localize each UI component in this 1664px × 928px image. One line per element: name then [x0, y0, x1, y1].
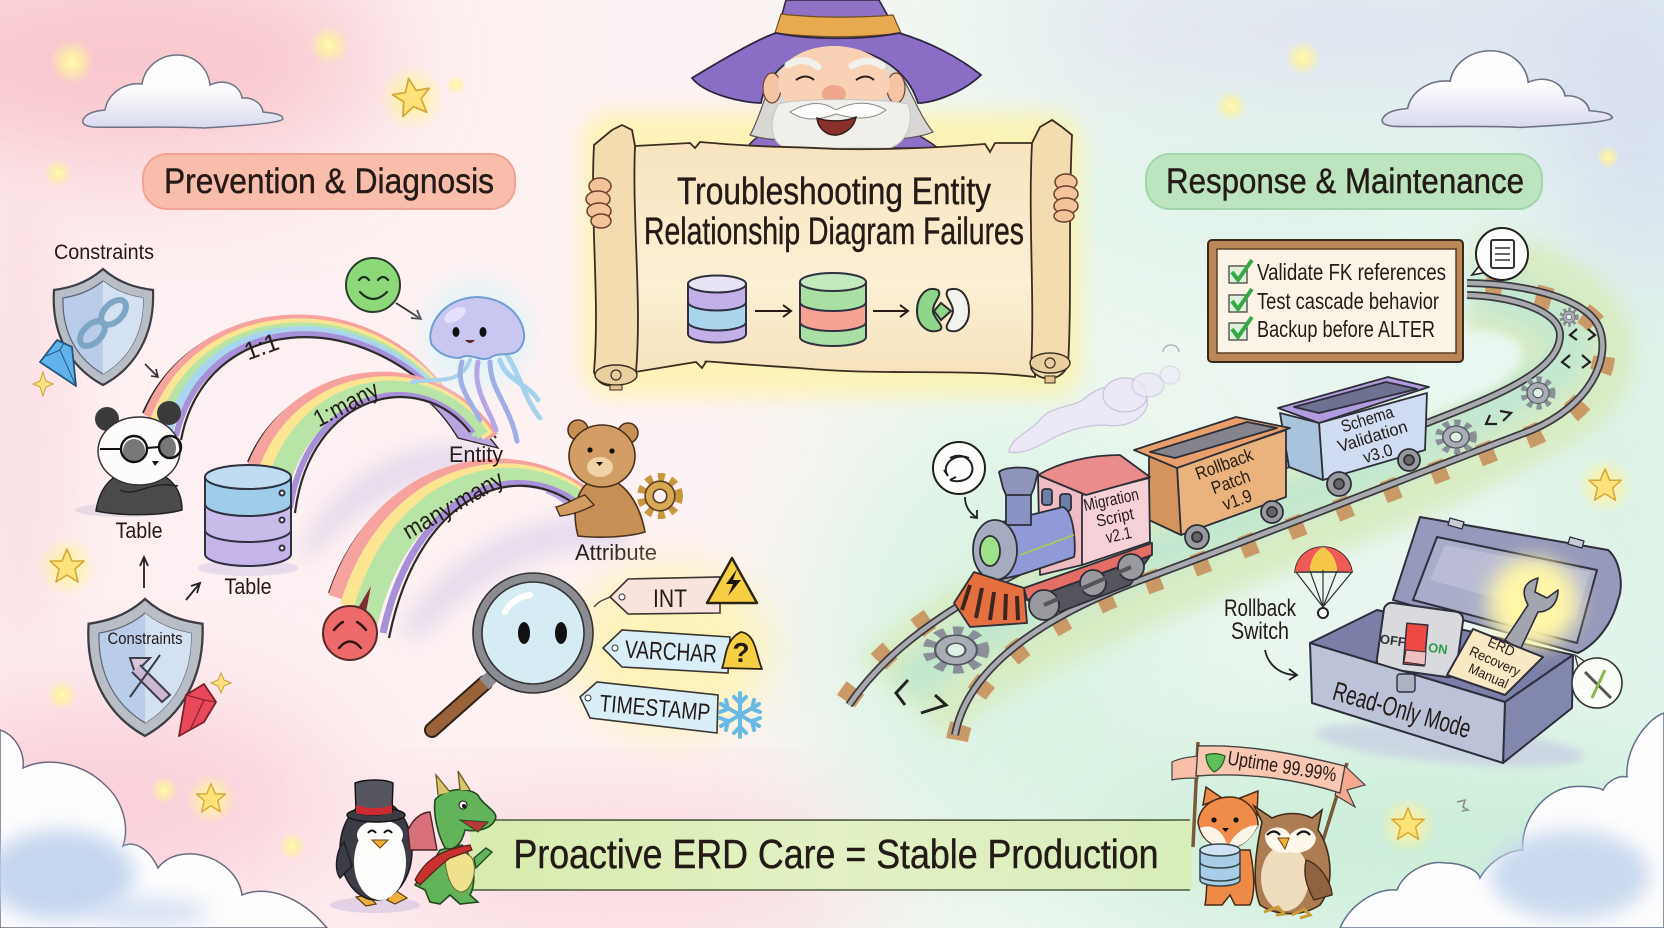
- footer banner: [470, 819, 1192, 891]
- label: rollback switch: [1224, 595, 1297, 645]
- owl: [1254, 806, 1332, 918]
- icon: uptime check: [1206, 754, 1225, 772]
- car text: schema validation: [1330, 400, 1415, 473]
- icon: wrench and screwdriver bubble: [1572, 655, 1622, 708]
- scroll right roll: [1030, 120, 1072, 383]
- cloud: bottom right: [1340, 713, 1664, 928]
- rollback switch plate: [1376, 602, 1464, 678]
- shield: linked constraints: [54, 269, 153, 385]
- car text: migration script: [1082, 485, 1148, 550]
- rainbow: 1:many: [248, 376, 498, 513]
- tag: TIMESTAMP: [580, 682, 718, 733]
- rainbow: many:many: [329, 463, 610, 638]
- car text: rollback patch: [1193, 444, 1270, 520]
- icon: sparkle red gem: [211, 673, 231, 693]
- icon: sparkle: [33, 372, 53, 396]
- icon: speech bubble document: [1472, 228, 1528, 280]
- wizard hair: [750, 50, 933, 140]
- wizard hat brim: [692, 33, 981, 103]
- car text: rollback patch: Rollback: [1193, 444, 1257, 484]
- wizard beard and mouth: [772, 100, 910, 148]
- car text: migration script: Script: [1094, 504, 1136, 531]
- title: Troubleshooting Entity: [677, 171, 991, 213]
- heading pill: prevention: [143, 154, 515, 209]
- arrow: shield up to panda: [140, 557, 148, 588]
- bear with gear: [556, 420, 679, 537]
- recovery manual: [1447, 628, 1543, 695]
- label: attribute: Attribute: [575, 540, 657, 565]
- fox holding database: [1198, 787, 1258, 905]
- scroll body: [634, 142, 1035, 377]
- icon: happy face: [346, 258, 400, 312]
- icons on track: [896, 309, 1595, 713]
- star: bottom right: [1380, 796, 1436, 854]
- wizard hat crown: [775, 0, 901, 37]
- car text: schema validation: Validation: [1335, 417, 1410, 456]
- icon: question bell: ?: [732, 637, 750, 668]
- label: table under panda: Table: [116, 518, 162, 543]
- shield: broken constraints: [88, 599, 203, 736]
- arrow: failing to broken: [873, 305, 908, 317]
- label: rollback switch: Switch: [1231, 618, 1289, 645]
- recovery manual: Manual: [1466, 660, 1511, 692]
- icon: angry face: [323, 586, 377, 660]
- icon: broken circle: [917, 289, 969, 331]
- arrow: healthy to failing: [755, 305, 791, 317]
- icon: chain link: [75, 295, 131, 351]
- label: read-only mode: Read-Only Mode: [1330, 676, 1474, 744]
- tag: VARCHAR: [603, 630, 730, 673]
- star: left: [37, 537, 97, 597]
- icon: snowflake: [720, 693, 760, 737]
- star: top left: [374, 60, 450, 136]
- arrow: shield to panda: [145, 364, 158, 377]
- grass along track: [905, 290, 1575, 700]
- penguin with top hat: [330, 780, 420, 913]
- icon: healthy database: [688, 276, 746, 342]
- magnifying glass: [432, 573, 593, 730]
- rainbow shadows: [300, 443, 640, 640]
- locomotive: migration script: [954, 455, 1152, 627]
- star: right: [1576, 458, 1634, 514]
- rollback switch plate: ON: [1427, 640, 1449, 657]
- arrow: happy face to jellyfish: [396, 303, 421, 319]
- glowing wrench: [1488, 558, 1578, 650]
- smoke: [1009, 345, 1180, 453]
- doodle near star: [1457, 800, 1468, 811]
- tag: VARCHAR: VARCHAR: [624, 636, 718, 668]
- label: rollback switch: Rollback: [1224, 595, 1297, 622]
- toolbox interior: [1310, 610, 1573, 702]
- banner text: Uptime 99.99%: [1226, 748, 1338, 786]
- heading pill: response: Response & Maintenance: [1166, 162, 1524, 201]
- car: rollback patch: [1134, 417, 1290, 549]
- jellyfish entity: [412, 280, 540, 441]
- icon: blue gem: [40, 340, 76, 386]
- tag: INT: INT: [653, 585, 687, 613]
- top hat: [347, 780, 405, 822]
- toolbox lid: [1393, 517, 1621, 653]
- hand right: [1054, 174, 1078, 222]
- scroll glow: [582, 112, 1082, 397]
- recovery manual: Recovery: [1467, 643, 1523, 679]
- label: table under database: Table: [224, 574, 272, 599]
- wizard robe: [747, 122, 938, 148]
- checklist item 3: Backup before ALTER: [1257, 316, 1435, 342]
- icon: broken key: [130, 655, 170, 702]
- tag glow: [570, 565, 770, 735]
- checklist item 2: Test cascade behavior: [1257, 288, 1439, 314]
- panel: title scroll: [586, 120, 1078, 390]
- panel: prevention and diagnosis: [33, 154, 770, 737]
- label: entity: Entity: [449, 442, 503, 467]
- toolbox body: [1310, 643, 1573, 763]
- car text: schema validation: v3.0: [1361, 440, 1395, 467]
- tag: TIMESTAMP: TIMESTAMP: [598, 690, 711, 727]
- car text: rollback patch: v1.9: [1220, 485, 1255, 514]
- rainbow: 1:1: [143, 316, 449, 440]
- panel: response and maintenance: [846, 154, 1622, 775]
- title: [644, 171, 1024, 253]
- car text: migration script: Migration: [1082, 485, 1141, 515]
- tag: INT: [594, 577, 720, 614]
- cloud: bottom left: [0, 730, 327, 928]
- icon: bear gear: [641, 477, 679, 515]
- label: 1:1: 1:1: [241, 328, 283, 366]
- car text: rollback patch: Patch: [1208, 466, 1253, 498]
- database cylinder: [198, 465, 298, 576]
- uptime banner: [1172, 742, 1365, 850]
- arrow: shield to database: [186, 583, 200, 600]
- wizard: [692, 0, 981, 148]
- checklist board: [1208, 240, 1463, 362]
- panda: [75, 401, 182, 517]
- dragon: [408, 771, 496, 904]
- rollback switch plate: OFF: [1379, 631, 1407, 650]
- label: 1:many: 1:many: [309, 376, 383, 433]
- wizard face: [763, 46, 905, 118]
- icon: question bell: [722, 632, 762, 669]
- label: many:many: many:many: [398, 466, 508, 545]
- car: schema validation: [1278, 377, 1429, 496]
- heading pill: prevention: Prevention & Diagnosis: [164, 162, 494, 201]
- icon: failing database: [800, 273, 866, 346]
- checklist item 1: Validate FK references: [1257, 259, 1446, 285]
- label: constraints on shield: Constraints: [108, 629, 182, 648]
- train track: [846, 283, 1604, 740]
- arrow: switch to toolbox: [1265, 650, 1297, 680]
- scroll left roll: [593, 125, 638, 390]
- toolbox: [1310, 517, 1621, 775]
- footer text: Proactive ERD Care = Stable Production: [514, 831, 1158, 877]
- label: constraints top: Constraints: [54, 241, 154, 264]
- car text: migration script: v2.1: [1104, 523, 1133, 547]
- hand left: [586, 178, 611, 228]
- icon: loop circle: [933, 442, 985, 494]
- cloud: top left: [83, 55, 283, 128]
- icon: warning triangle: [707, 558, 757, 603]
- star: bottom left: [186, 774, 236, 824]
- title: Relationship Diagram Failures: [644, 211, 1024, 253]
- icon: red gem: [179, 684, 216, 736]
- fox database: [1200, 844, 1240, 886]
- car text: schema validation: Schema: [1339, 402, 1396, 436]
- icon: parachute: [1295, 547, 1352, 618]
- arrow: loop to locomotive: [965, 497, 977, 518]
- recovery manual: ERD: [1486, 633, 1518, 659]
- heading pill: response: [1146, 154, 1542, 209]
- cloud: top right: [1382, 51, 1612, 127]
